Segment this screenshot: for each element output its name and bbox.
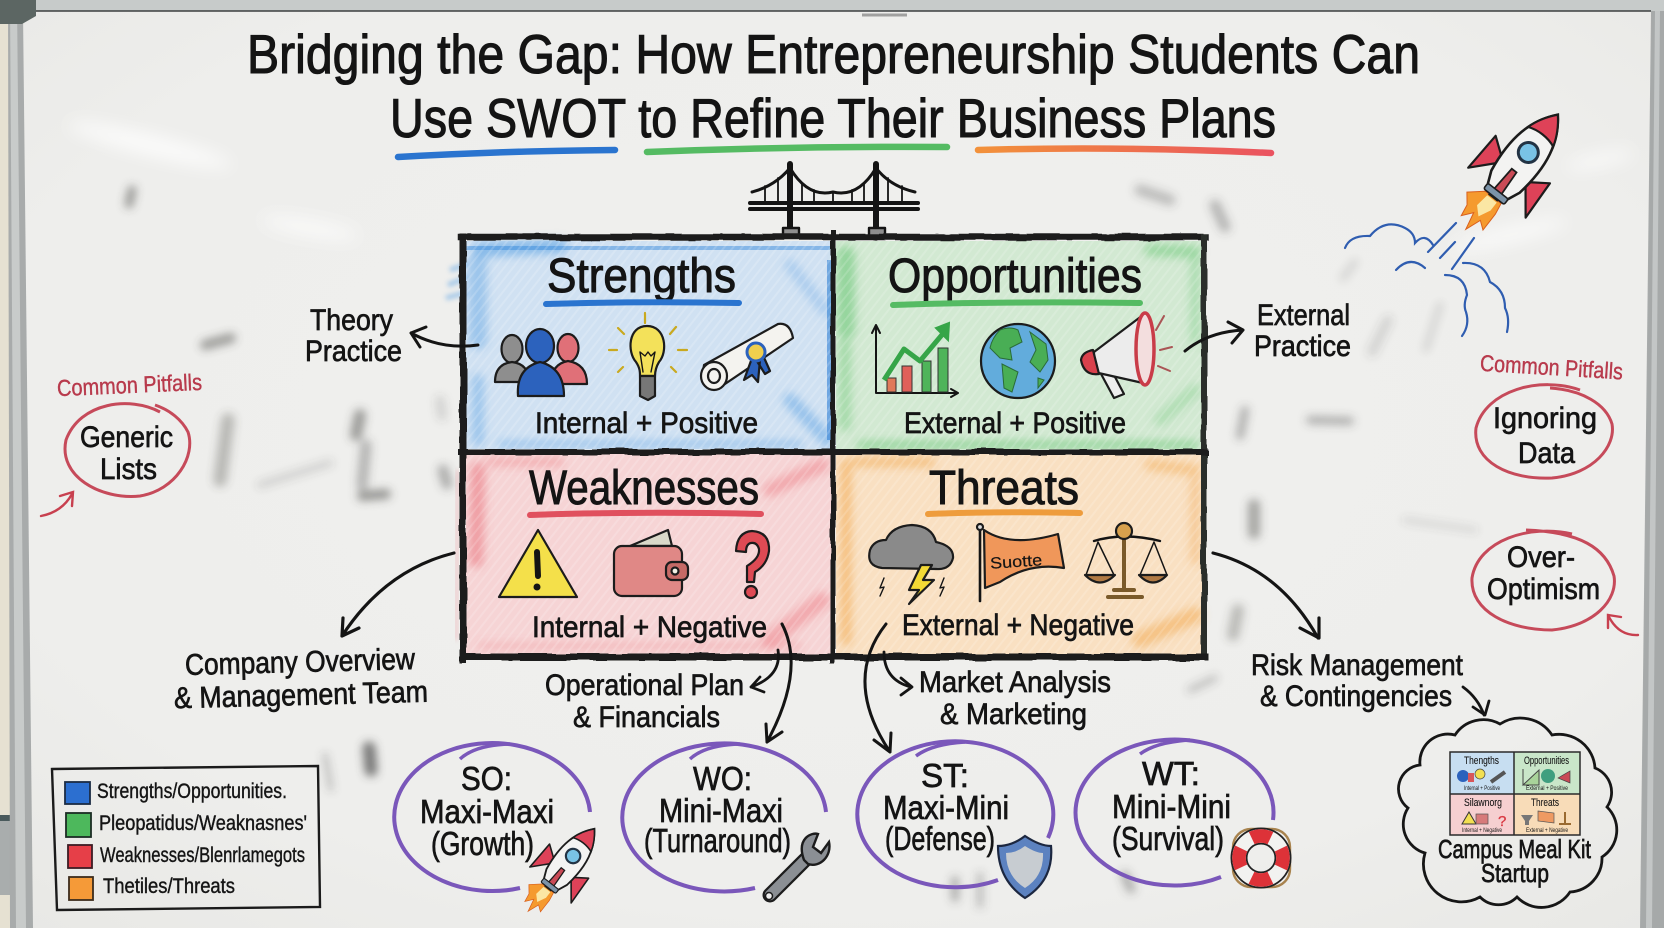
label: company overview bbox=[174, 643, 428, 715]
strategy: SO: SO: bbox=[461, 760, 512, 797]
label: market analysis bbox=[919, 666, 1111, 731]
panel: opportunities bbox=[836, 241, 1202, 449]
icon: life ring bbox=[1233, 829, 1290, 887]
label: risk management: Risk Management bbox=[1251, 649, 1464, 682]
strategy: SO bbox=[394, 743, 616, 928]
label: company overview: Company Overview bbox=[185, 643, 416, 682]
legend bbox=[52, 766, 320, 910]
mini SWOT grid: Internal + Positive bbox=[1464, 786, 1500, 792]
arrow: to campus startup bbox=[1463, 687, 1489, 715]
mini SWOT grid: Opportunities bbox=[1524, 755, 1569, 767]
mini SWOT grid: External + Negative bbox=[1526, 828, 1569, 834]
arrow: to WO bbox=[766, 624, 791, 742]
example: campus meal kit: Startup bbox=[1481, 858, 1549, 888]
label: External + Negative bbox=[902, 609, 1134, 642]
label: theory practice bbox=[305, 304, 402, 368]
icon: small rocket bbox=[508, 812, 616, 928]
icon: flag: Suotte bbox=[990, 552, 1043, 573]
strategy: WO: Mini-Maxi bbox=[659, 792, 783, 829]
label: external practice: External bbox=[1257, 299, 1350, 332]
icon: megaphone bbox=[1081, 313, 1172, 398]
pitfall: generic lists: Lists bbox=[100, 453, 157, 486]
icon: growth chart bbox=[872, 323, 958, 397]
strategy: ST: (Defense) bbox=[885, 820, 995, 857]
strategy: WO bbox=[622, 743, 829, 900]
label: external practice bbox=[1254, 299, 1351, 363]
panel: strengths: Strengths bbox=[547, 250, 736, 303]
mini SWOT grid bbox=[1450, 752, 1580, 835]
pitfall: ignoring data: Data bbox=[1518, 437, 1575, 470]
icon: shield bbox=[998, 836, 1051, 898]
icon: warning sign bbox=[499, 530, 577, 597]
strategy: WT: Mini-Mini bbox=[1112, 788, 1231, 825]
legend: weaknesses: Weaknesses/Blenrlamegots bbox=[100, 844, 305, 867]
arrow: to ST bbox=[865, 624, 891, 752]
label: External + Positive bbox=[904, 407, 1126, 440]
arrow: weaknesses to company overview bbox=[342, 553, 454, 636]
legend: strengths: Strengths/Opportunities. bbox=[97, 780, 287, 803]
title: Bridging the Gap: How Entrepreneurship Students Can bbox=[247, 23, 1420, 85]
label: operational plan: Operational Plan bbox=[545, 669, 744, 702]
example: campus meal kit: Campus Meal Kit bbox=[1438, 834, 1592, 864]
icon: rocket bbox=[1437, 91, 1588, 254]
strategy: WO: WO: bbox=[693, 760, 752, 797]
pitfall: ignoring data: Common Pitfalls bbox=[1479, 350, 1624, 384]
icon: light bulb bbox=[609, 313, 687, 400]
arrow: to operational plan bbox=[751, 650, 778, 692]
icon: scales bbox=[1085, 523, 1167, 597]
panel: opportunities: Opportunities bbox=[888, 250, 1142, 303]
panel: strengths bbox=[446, 241, 832, 449]
strategy: WT: (Survival) bbox=[1112, 820, 1224, 857]
pitfall: over-optimism: Over- bbox=[1507, 541, 1575, 574]
strategy: ST: Maxi-Mini bbox=[883, 789, 1009, 826]
strategy: WT: WT: bbox=[1142, 755, 1200, 792]
pitfall: generic lists: Generic bbox=[80, 421, 173, 454]
icon: globe bbox=[981, 324, 1055, 398]
icon: diploma bbox=[701, 324, 793, 390]
mini SWOT grid: Threats bbox=[1531, 797, 1559, 809]
label: Internal + Positive bbox=[535, 407, 758, 440]
strategy: WO: (Turnaround) bbox=[644, 822, 791, 859]
arrow: threats to risk management bbox=[1213, 553, 1319, 638]
strategy: SO: (Growth) bbox=[431, 825, 534, 862]
label: market analysis: & Marketing bbox=[940, 698, 1087, 731]
label: operational plan bbox=[545, 669, 744, 734]
icon: team of people bbox=[495, 329, 587, 396]
label: Internal + Negative bbox=[532, 611, 767, 644]
label: company overview: & Management Team bbox=[174, 676, 428, 715]
arrow: to market analysis bbox=[884, 652, 912, 695]
title: Use SWOT to Refine Their Business Plans bbox=[390, 87, 1276, 149]
pitfall: over-optimism: Optimism bbox=[1487, 573, 1600, 606]
example: campus meal kit bbox=[1398, 718, 1617, 907]
exhaust clouds bbox=[1345, 223, 1508, 336]
pitfall: generic lists: Common Pitfalls bbox=[57, 369, 202, 401]
label: theory practice: Theory bbox=[310, 304, 393, 337]
icon: bridge bbox=[750, 164, 918, 236]
legend: opportunities: Pleopatidus/Weaknasnes' bbox=[99, 812, 307, 835]
mini SWOT grid: External + Positive bbox=[1526, 786, 1569, 792]
panel: threats bbox=[836, 453, 1202, 655]
strategy: ST bbox=[857, 741, 1053, 898]
mini SWOT grid: Thengths bbox=[1464, 755, 1499, 767]
pitfall: ignoring data bbox=[1476, 350, 1624, 478]
label: external practice: Practice bbox=[1254, 330, 1351, 363]
arrow: strengths to theory bbox=[411, 327, 478, 347]
pitfall: over-optimism bbox=[1472, 530, 1638, 635]
icon: question mark bbox=[736, 531, 769, 598]
label: risk management bbox=[1251, 649, 1464, 713]
SWOT matrix bbox=[446, 232, 1205, 662]
title bbox=[247, 23, 1420, 149]
mini SWOT grid: Internal + Negative bbox=[1462, 828, 1503, 834]
panel: weaknesses: Weaknesses bbox=[529, 462, 759, 515]
icon: wrench bbox=[766, 834, 829, 900]
cloud outline bbox=[1398, 718, 1617, 907]
strategy: WT bbox=[1076, 740, 1290, 887]
label: operational plan: & Financials bbox=[573, 701, 720, 734]
strategy: SO: Maxi-Maxi bbox=[420, 793, 554, 830]
mini SWOT grid: ? bbox=[1498, 813, 1506, 830]
arrow: opportunities to external bbox=[1185, 322, 1243, 351]
legend: threats bbox=[69, 875, 235, 900]
legend: weaknesses bbox=[68, 844, 305, 868]
pitfall: ignoring data: Ignoring bbox=[1493, 402, 1597, 435]
icon: storm cloud bbox=[869, 525, 953, 604]
pitfall: generic lists bbox=[41, 369, 202, 516]
label: risk management: & Contingencies bbox=[1260, 680, 1452, 713]
legend: threats: Thetiles/Threats bbox=[103, 875, 235, 898]
title underlines bbox=[398, 147, 1271, 157]
rocket launch bbox=[1345, 91, 1588, 336]
icon: wallet bbox=[614, 530, 688, 596]
icon: flag bbox=[977, 524, 1064, 601]
mini SWOT grid: Silawnorg bbox=[1464, 797, 1502, 809]
panel: weaknesses bbox=[456, 453, 832, 655]
strategy: ST: ST: bbox=[921, 757, 969, 794]
panel: threats: Threats bbox=[929, 462, 1079, 515]
matrix grid lines bbox=[461, 232, 1205, 662]
label: market analysis: Market Analysis bbox=[919, 666, 1111, 699]
label: theory practice: Practice bbox=[305, 335, 402, 368]
